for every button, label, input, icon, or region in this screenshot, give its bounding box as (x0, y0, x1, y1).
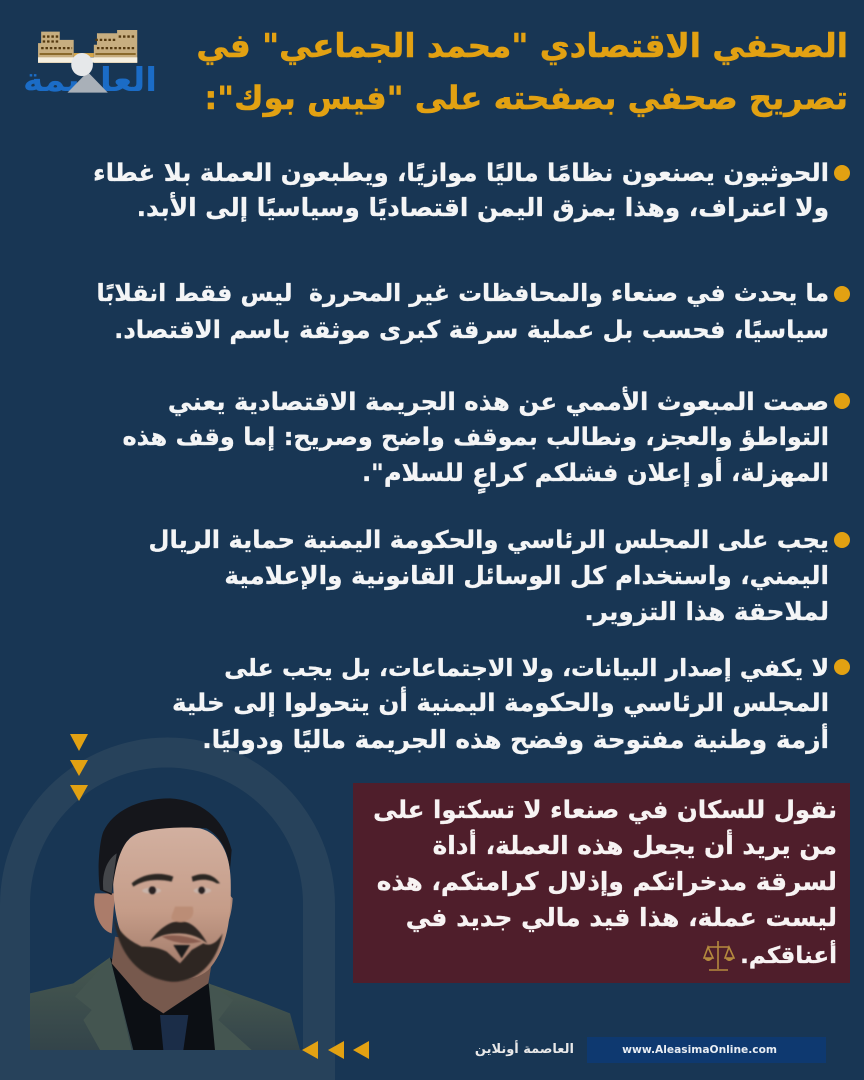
text: المهزلة، أو إعلان فشلكم كراعٍ للسلام". (362, 458, 829, 487)
portrait (30, 798, 300, 1050)
text: الصحفي الاقتصادي "محمد الجماعي" في (196, 27, 848, 65)
text: لا يكفي إصدار البيانات، ولا الاجتماعات، بل يجب على (224, 654, 829, 682)
footer website (587, 1037, 826, 1063)
text: تصريح صحفي بصفحته على "فيس بوك": (204, 79, 848, 117)
text: لملاحقة هذا التزوير. (584, 597, 829, 626)
text: أزمة وطنية مفتوحة وفضح هذه الجريمة ماليًا ودوليًا. (202, 725, 829, 754)
text: ولا اعتراف، وهذا يمزق اليمن اقتصاديًا وسياسيًا إلى الأبد. (137, 193, 829, 222)
text: أعناقكم. (740, 943, 837, 969)
text: يجب على المجلس الرئاسي والحكومة اليمنية حماية الريال (148, 526, 829, 554)
text: ما يحدث في صنعاء والمحافظات غير المحررة ليس فقط انقلابًا (96, 279, 829, 307)
footer website: www.AleasimaOnline.com (622, 1043, 777, 1056)
bullet point 3 (122, 386, 850, 494)
text: التواطؤ والعجز، ونطالب بموقف واضح وصريح: إما وقف هذه (122, 423, 829, 451)
text: الحوثيون يصنعون نظامًا ماليًا موازيًا، ويطبعون العملة بلا غطاء (93, 158, 829, 187)
text: لسرقة مدخراتكم وإذلال كرامتكم، هذه (377, 867, 837, 896)
text: صمت المبعوث الأممي عن هذه الجريمة الاقتصادية يعني (168, 387, 829, 416)
title (196, 27, 848, 118)
text: من يريد أن يجعل هذه العملة، أداة (433, 831, 837, 860)
text: سياسيًا، فحسب بل عملية سرقة كبرى موثقة باسم الاقتصاد. (114, 315, 829, 344)
logo: العاصمة (23, 60, 157, 99)
bullet point 1 (93, 158, 850, 222)
bullet point 2 (96, 279, 850, 344)
text: المجلس الرئاسي والحكومة اليمنية أن يتحولوا إلى خلية (172, 688, 829, 717)
callout (353, 783, 850, 983)
footer brand name: العاصمة أونلاين (475, 1042, 574, 1057)
icon: scales (703, 941, 735, 971)
text: نقول للسكان في صنعاء لا تسكتوا على (373, 795, 837, 824)
callout text (373, 795, 837, 969)
text: اليمني، واستخدام كل الوسائل القانونية والإعلامية (224, 561, 829, 590)
logo (23, 30, 157, 99)
text: ليست عملة، هذا قيد مالي جديد في (406, 903, 837, 932)
left arrows (302, 1041, 369, 1059)
bullet point 5 (172, 654, 850, 754)
bullet point 4 (148, 526, 850, 626)
icon: down arrows (70, 734, 88, 801)
